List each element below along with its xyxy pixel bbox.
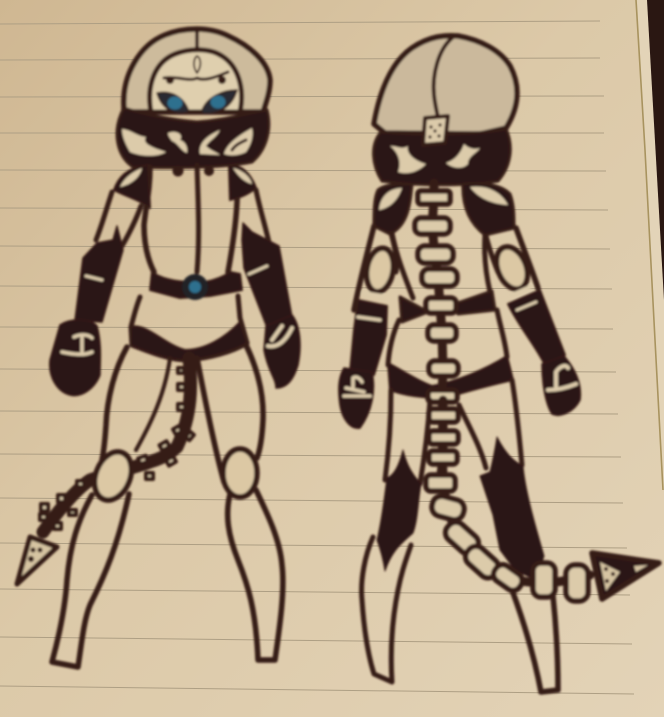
left knee front bbox=[88, 446, 138, 506]
figure: front view bbox=[17, 29, 300, 667]
left shoulder back bbox=[374, 184, 412, 234]
eye right bbox=[201, 90, 237, 114]
back torso bbox=[388, 233, 513, 398]
eye left bbox=[157, 92, 189, 113]
right arm back bbox=[486, 228, 580, 415]
left leg front bbox=[52, 347, 170, 667]
right shoulder back bbox=[463, 183, 514, 235]
spine chain bbox=[415, 183, 458, 483]
tail spade back bbox=[592, 553, 659, 599]
face details bbox=[164, 72, 228, 79]
belt with blue gem bbox=[150, 272, 242, 300]
tail spade front bbox=[17, 537, 57, 584]
hips front bbox=[131, 296, 247, 360]
torso front bbox=[144, 165, 237, 272]
right arm front bbox=[229, 166, 300, 388]
helmet back bbox=[374, 36, 517, 134]
collar front bbox=[117, 108, 269, 167]
left arm front bbox=[50, 165, 150, 396]
tail chain back bbox=[426, 400, 590, 601]
right leg back bbox=[459, 380, 558, 692]
dice ornament bbox=[423, 116, 448, 145]
helmet front bbox=[124, 29, 270, 114]
tail front bbox=[40, 358, 194, 532]
figure: back view bbox=[339, 36, 659, 692]
left arm back bbox=[339, 226, 397, 428]
left leg back bbox=[362, 390, 430, 682]
collar back bbox=[374, 129, 510, 185]
right leg front bbox=[197, 345, 283, 660]
